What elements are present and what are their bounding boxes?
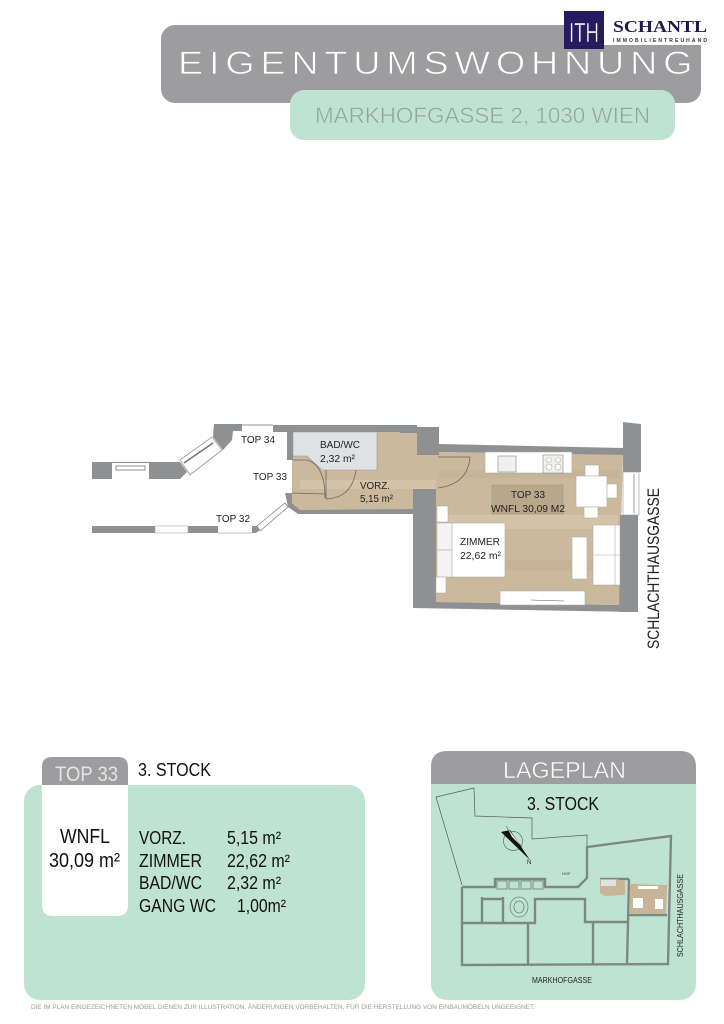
room area list: GANG WC: [139, 896, 216, 916]
courtyard outline: [436, 788, 587, 885]
compass: [501, 826, 531, 866]
room area list: 2,32 m²: [227, 873, 281, 893]
street label vertical: SCHLACHTHAUSGASSE: [676, 874, 685, 957]
address banner: MARKHOFGASSE 2, 1030 WIEN: [315, 103, 650, 128]
room area list: BAD/WC: [139, 873, 202, 893]
total area card: 30,09 m²: [49, 850, 120, 872]
room labels: TOP 34: [241, 435, 275, 446]
room labels: TOP 33: [253, 472, 287, 483]
stair: [510, 897, 528, 917]
apartment highlight: [600, 879, 667, 914]
room area list: 22,62 m²: [227, 851, 290, 871]
wood floor: [292, 432, 623, 605]
panel: Lageplan: [431, 751, 696, 1000]
logo: Schantl Immobilientreuhand: IMMOBILIENTREUHAND: [613, 38, 707, 44]
room labels: TOP 32: [216, 514, 250, 525]
room labels: BAD/WC: [320, 440, 360, 451]
header banner: title: EIGENTUMSWOHNUNG: [178, 46, 692, 81]
address banner: [290, 90, 675, 140]
street label: MARKHOFGASSE: [532, 976, 592, 985]
compass: N: [527, 860, 531, 866]
apartment walls: [273, 422, 641, 612]
panel: apartment areas: [24, 757, 365, 1000]
Lageplan heading: LAGEPLAN: [503, 757, 626, 783]
logo: Schantl Immobilientreuhand: [564, 11, 712, 49]
room labels: 22,62 m²: [460, 551, 502, 562]
floor plan: [92, 422, 641, 612]
corridor walls and neighbouring windows: [92, 424, 288, 533]
room labels: [216, 435, 502, 562]
tab: TOP 33: [42, 757, 128, 786]
east window: [623, 472, 639, 515]
building walls: [462, 836, 671, 965]
room area list: 5,15 m²: [227, 828, 281, 848]
label box: TOP 33 total area: WNFL 30,09 M2: [491, 504, 565, 515]
header banner: title: [161, 25, 701, 103]
tab: TOP 33: TOP 33: [55, 763, 118, 786]
bathroom: [293, 432, 377, 470]
doors: [292, 457, 470, 499]
total area card: WNFL: [60, 826, 110, 848]
label box: TOP 33 total area: TOP 33: [511, 490, 545, 501]
Lageplan heading: [431, 751, 696, 784]
room area list: 1,00m²: [237, 896, 286, 916]
room area list: ZIMMER: [139, 851, 202, 871]
logo: Schantl Immobilientreuhand: SCHANTL: [613, 17, 707, 36]
total area card: [42, 785, 128, 916]
label box: TOP 33 total area: [491, 485, 565, 515]
floor label: 3. STOCK: [527, 794, 599, 814]
bump rooms: [497, 881, 543, 889]
room labels: VORZ.: [360, 481, 390, 492]
logo: Schantl Immobilientreuhand: ITH: [569, 17, 599, 48]
site plan: [436, 788, 685, 985]
footer disclaimer: DIE IM PLAN EINGEZEICHNETEN MÖBEL DIENEN ZUR ILLUSTRATION, ÄNDERUNGEN VORBEHALTEN, FÜR DIE HERSTELLUNG VON EINBAUMÖBELN UNGEEIGNET.: [31, 1004, 535, 1011]
room labels: 5,15 m²: [360, 494, 394, 505]
room labels: ZIMMER: [460, 537, 500, 548]
courtyard label: HOF: [562, 871, 571, 876]
room labels: 2,32 m²: [320, 454, 356, 465]
room area list: VORZ.: [139, 828, 186, 848]
room area list: [139, 828, 290, 916]
street label: Schlachthausgasse: SCHLACHTHAUSGASSE: [644, 488, 663, 649]
furniture: [436, 452, 620, 605]
floor label: 3. STOCK: [138, 760, 211, 780]
